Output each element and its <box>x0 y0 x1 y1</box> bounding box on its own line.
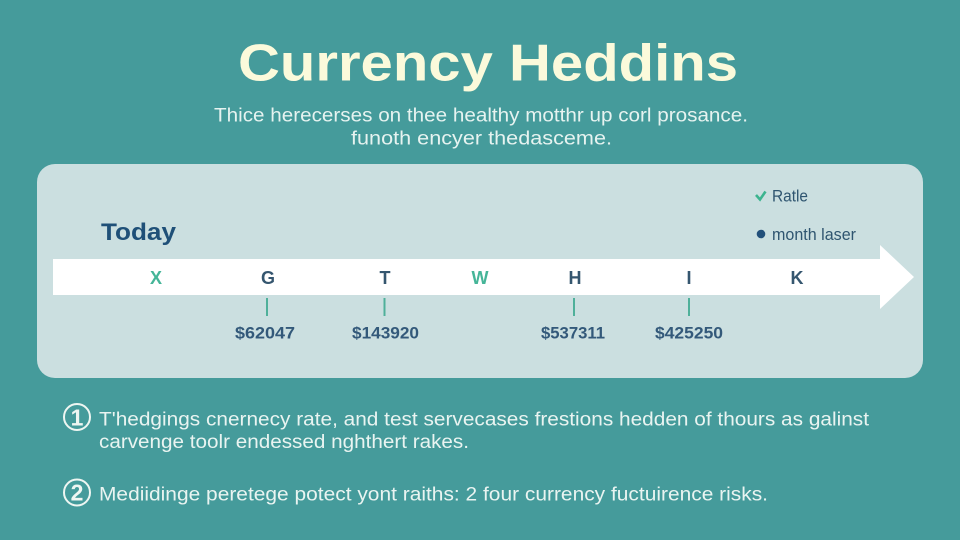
text: point 1: T'hedgings cnernecy rate, and test servecases frestions hedden of thours as galinst <box>99 410 870 430</box>
timeline values <box>235 324 723 342</box>
text: point 1 <box>99 410 870 453</box>
timeline letters <box>150 268 804 288</box>
timeline letters: K <box>790 268 804 288</box>
icon: number 2: 2 <box>71 480 83 506</box>
text: point 2: Mediidinge peretege potect yont raiths: 2 four currency fuctuirence risks. <box>99 484 768 506</box>
timeline letters: W <box>472 268 488 288</box>
subtitle text <box>214 106 748 150</box>
icon: number 1: 1 <box>71 404 84 430</box>
timeline values: $425250 <box>655 324 723 342</box>
subtitle text: Thice herecerses on thee healthy motthr up corl prosance. <box>214 106 748 126</box>
legend <box>756 188 856 244</box>
timeline letters: G <box>261 268 275 288</box>
timeline letters: I <box>686 268 692 288</box>
text: point 1: carvenge toolr endessed nghthert rakes. <box>99 432 469 453</box>
legend label: rate: Ratle <box>772 188 808 206</box>
heading: today: Today <box>101 219 177 246</box>
point 1 <box>64 404 870 453</box>
point 2 <box>64 480 768 506</box>
icon: dot <box>757 230 765 238</box>
subtitle text: funoth encyer thedasceme. <box>351 128 612 150</box>
timeline letters: T <box>380 268 390 288</box>
icon: number 2 <box>64 480 90 506</box>
timeline letters: H <box>568 268 582 288</box>
legend label: month: month laser <box>772 226 856 244</box>
timeline values: $143920 <box>352 324 419 342</box>
title: Currency Heddins <box>238 34 738 92</box>
arrow: timeline <box>53 245 914 309</box>
panel: timeline <box>37 164 923 378</box>
timeline values: $62047 <box>235 324 295 342</box>
icon: check mark <box>756 192 766 200</box>
icon: number 1 <box>64 404 90 430</box>
timeline values: $537311 <box>541 324 605 342</box>
tick marks <box>266 298 690 316</box>
timeline letters: X <box>150 268 162 288</box>
